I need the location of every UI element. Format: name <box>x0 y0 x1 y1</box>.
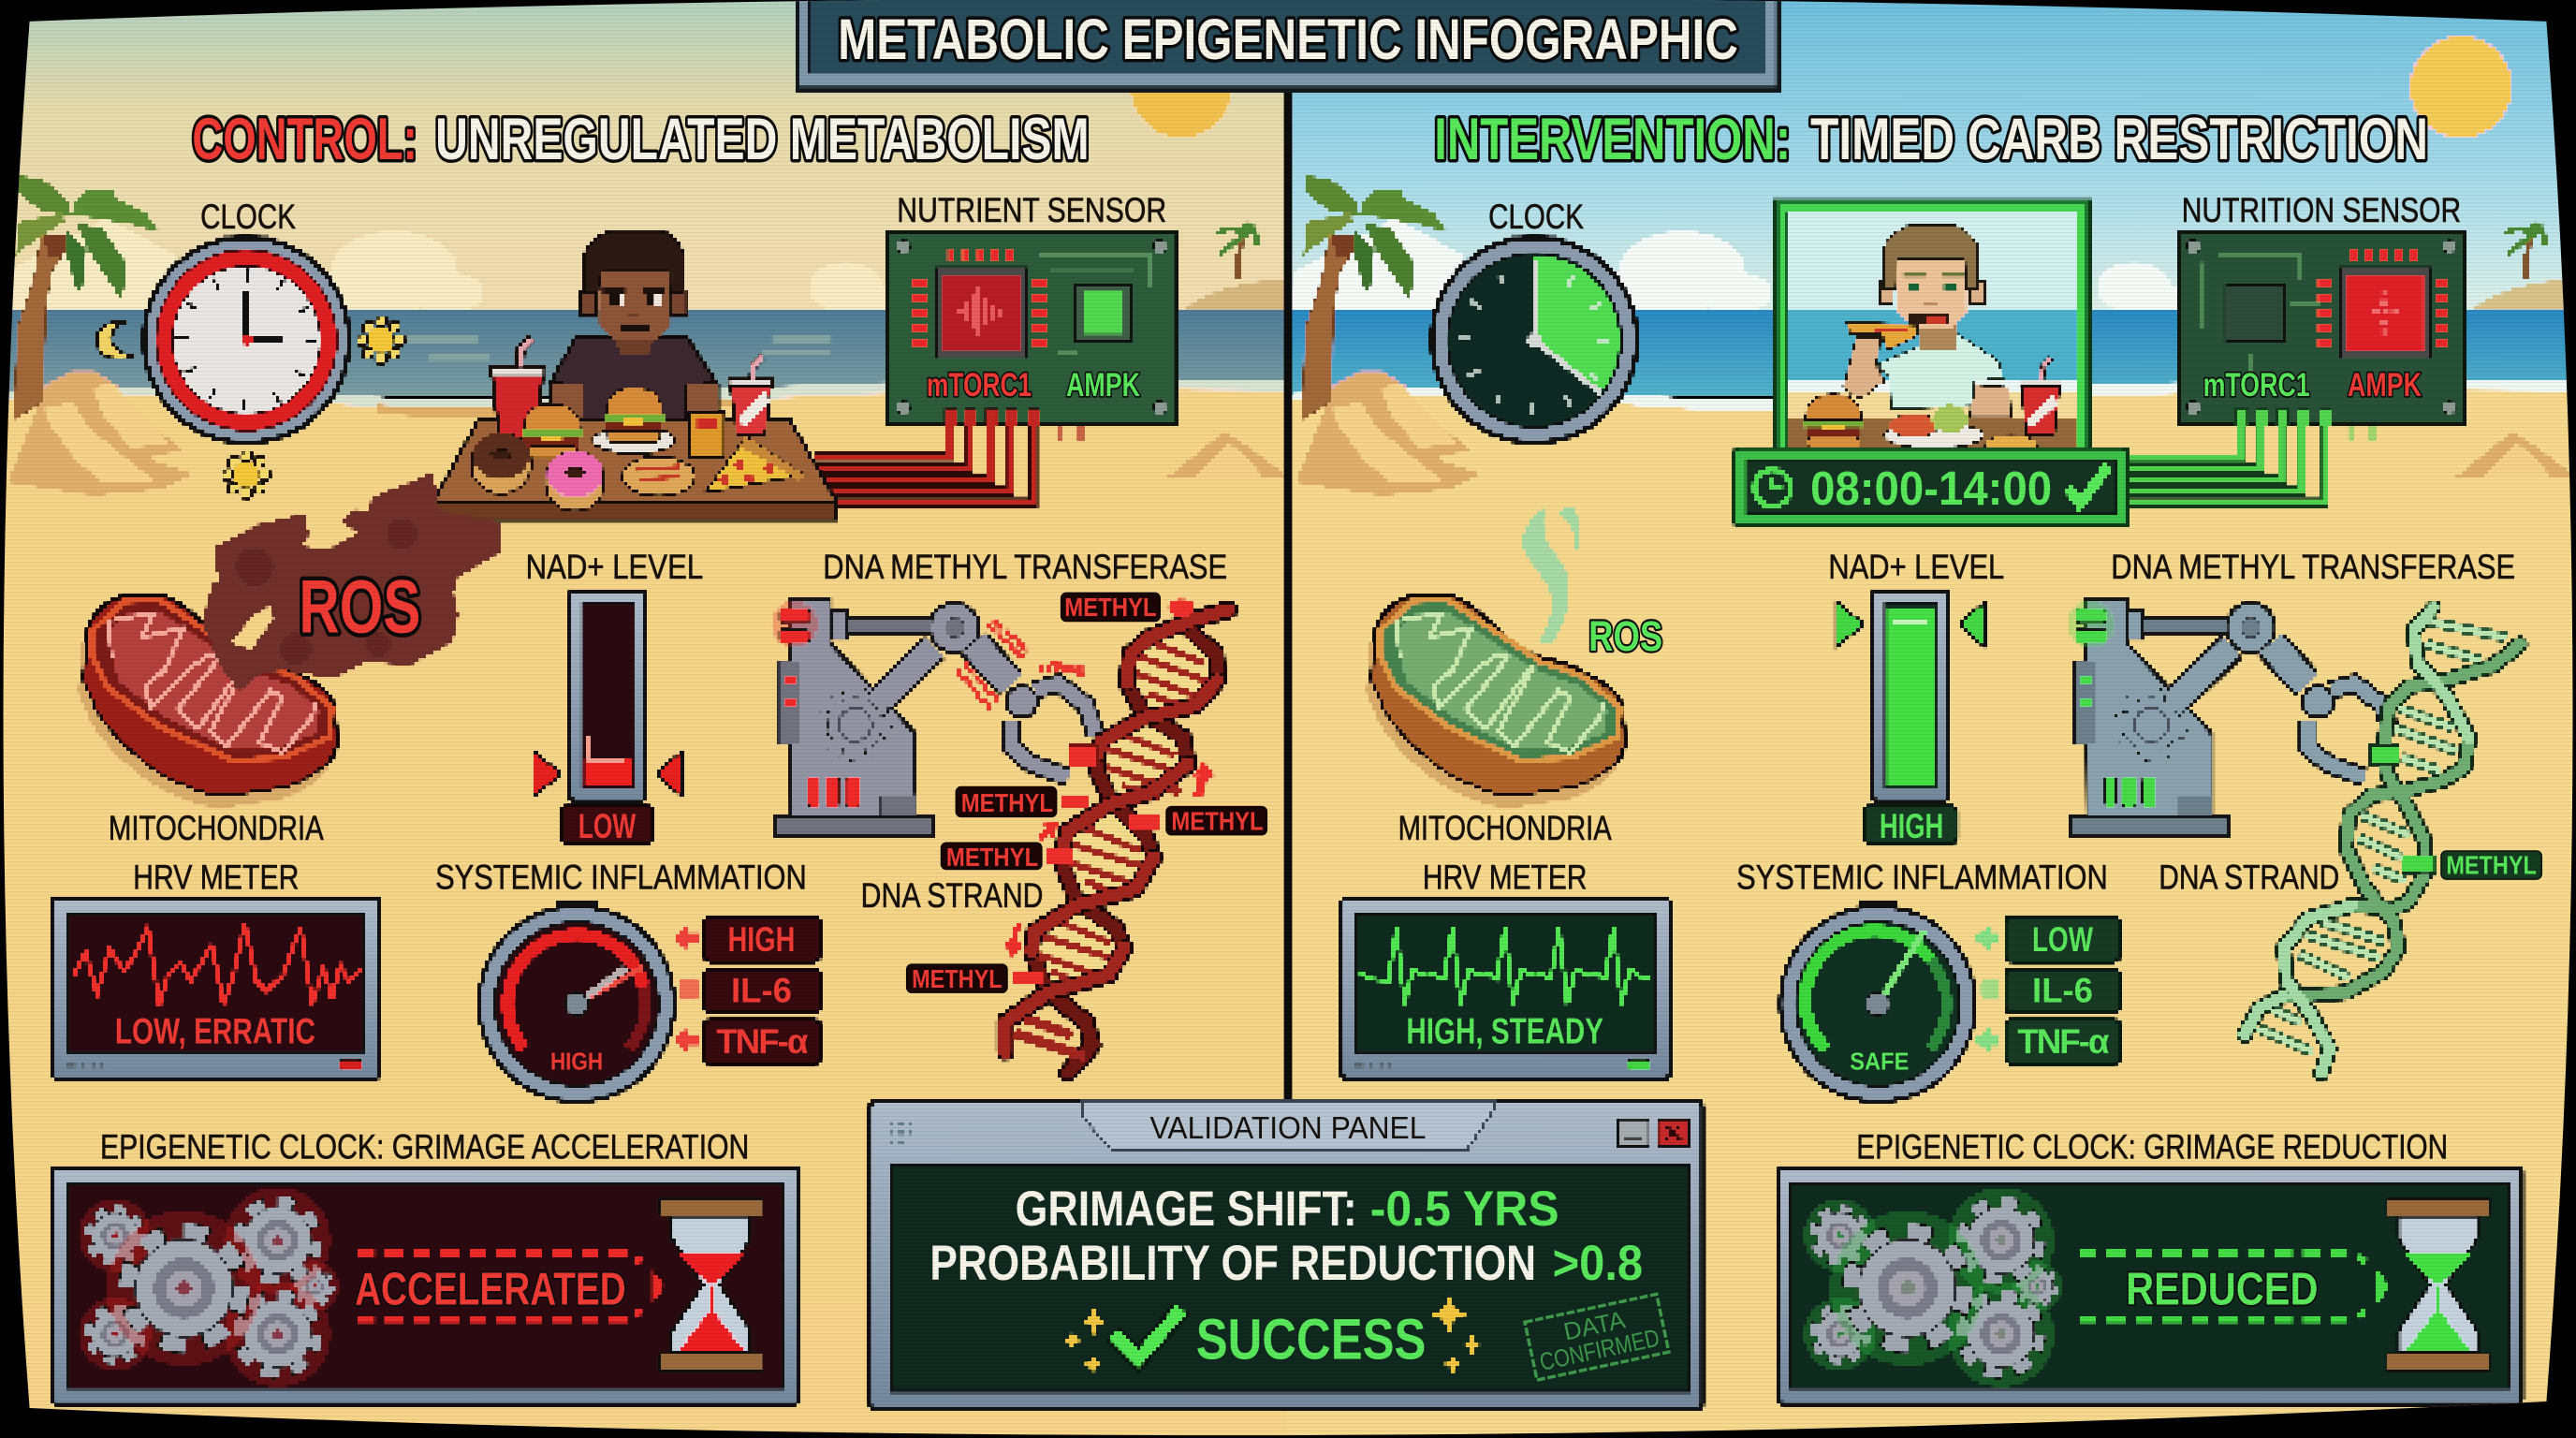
eating window badge: 08:00-14:00 <box>1810 462 2052 515</box>
table and food <box>433 339 836 520</box>
eating window badge <box>1734 448 2128 526</box>
hrv meter control <box>52 858 379 1078</box>
nad+ meter: NAD+ LEVEL <box>526 548 703 586</box>
inflammation gauge control <box>435 858 820 1101</box>
backdrop: control beach <box>0 0 1288 1438</box>
clock <box>144 198 348 442</box>
heading: control <box>191 114 1090 163</box>
nutrient sensor <box>889 191 1175 426</box>
data confirmed stamp: CONFIRMED <box>1537 1324 1661 1376</box>
epigenetic clock: acceleration: EPIGENETIC CLOCK: GRIMAGE ACCELERATION <box>100 1127 749 1166</box>
inflammation gauge control: HIGH <box>728 920 795 959</box>
hrv meter intervention: HIGH, STEADY <box>1406 1011 1603 1051</box>
heading: control: UNREGULATED METABOLISM <box>435 107 1090 172</box>
title banner <box>798 0 1778 89</box>
nad+ meter <box>526 548 703 845</box>
nad+ meter high: HIGH <box>1880 807 1943 845</box>
mitochondria healthy <box>1367 594 1625 847</box>
validation panel: VALIDATION PANEL <box>1150 1111 1426 1146</box>
validation panel <box>871 1103 1702 1408</box>
sensor wires <box>816 419 1081 503</box>
mitochondria healthy: MITOCHONDRIA <box>1398 809 1612 847</box>
methyl tags control: METHYL <box>946 843 1038 872</box>
data confirmed stamp <box>1525 1294 1669 1380</box>
inflammation gauge intervention: LOW <box>2032 920 2093 959</box>
man <box>552 231 718 420</box>
dna strand intervention <box>2159 608 2520 1073</box>
hrv meter intervention: HRV METER <box>1423 858 1587 896</box>
methyl tags control: METHYL <box>1064 593 1157 622</box>
inflammation gauge intervention: IL-6 <box>2032 972 2093 1010</box>
methyl tags control: METHYL <box>961 788 1053 817</box>
success row <box>1064 1297 1479 1373</box>
methyl tags control <box>907 593 1266 993</box>
dna methyl transferase robot: DNA METHYL TRANSFERASE <box>823 548 1227 586</box>
inflammation gauge control: HIGH <box>550 1048 603 1076</box>
dna methyl transferase robot calm <box>2069 548 2515 835</box>
character: overeating man at table <box>433 231 836 520</box>
panel: intervention <box>1342 107 2541 1403</box>
clock: eating window <box>1432 198 1636 442</box>
heading: control: CONTROL: <box>192 107 417 172</box>
inflammation gauge intervention: SYSTEMIC INFLAMMATION <box>1736 858 2108 896</box>
data confirmed stamp: DATA <box>1561 1305 1628 1346</box>
methyl tag intervention: METHYL <box>2446 851 2537 880</box>
epigenetic clock: reduction: REDUCED <box>2126 1264 2318 1314</box>
inflammation gauge control: SYSTEMIC INFLAMMATION <box>435 858 807 896</box>
inflammation gauge control: IL-6 <box>731 972 792 1010</box>
ros wisp: ROS <box>1588 612 1662 660</box>
heading: intervention <box>1434 107 2428 172</box>
methyl tags control: METHYL <box>1171 806 1264 835</box>
nutrition sensor: AMPK <box>2348 367 2422 404</box>
methyl tags control: METHYL <box>912 964 1003 993</box>
nad+ meter: LOW <box>578 807 636 845</box>
inflammation gauge intervention: SAFE <box>1850 1048 1909 1076</box>
icon: sun right <box>359 317 404 363</box>
panel: control <box>52 107 1266 1403</box>
epigenetic clock: reduction: EPIGENETIC CLOCK: GRIMAGE REDUCTION <box>1856 1127 2448 1166</box>
nad+ meter high <box>1828 548 2004 845</box>
inflammation gauge intervention: TNF-α <box>2017 1022 2110 1061</box>
epigenetic clock: reduction <box>1779 1127 2522 1403</box>
inflammation gauge intervention <box>1736 858 2119 1101</box>
grimage shift result: -0.5 YRS <box>1370 1181 1559 1237</box>
probability result: >0.8 <box>1553 1236 1643 1291</box>
centre divider <box>1284 82 1292 1117</box>
nutrition sensor <box>2178 191 2465 426</box>
epigenetic clock: acceleration <box>52 1127 798 1403</box>
hrv meter control: LOW, ERRATIC <box>115 1011 315 1051</box>
inflammation gauge control: TNF-α <box>716 1022 809 1061</box>
heading: intervention: TIMED CARB RESTRICTION <box>1810 107 2428 172</box>
dna strand control: DNA STRAND <box>861 876 1043 915</box>
clock: CLOCK <box>200 198 296 236</box>
portrait: man eating in window <box>1776 200 2089 457</box>
hrv meter intervention <box>1342 858 1669 1078</box>
hrv meter control: HRV METER <box>133 858 299 896</box>
grimage shift result: GRIMAGE SHIFT: <box>1016 1181 1357 1237</box>
backdrop: intervention beach <box>1288 0 2576 1438</box>
dna strand intervention: DNA STRAND <box>2159 858 2339 896</box>
clock: eating window: CLOCK <box>1488 198 1584 236</box>
nutrition sensor: mTORC1 <box>2203 367 2310 404</box>
mitochondria <box>79 594 337 847</box>
icon: moon <box>97 320 133 358</box>
ros smoke cloud: ROS <box>299 565 420 650</box>
nutrient sensor: mTORC1 <box>927 367 1032 404</box>
epigenetic clock: acceleration: ACCELERATED <box>355 1264 626 1314</box>
ros wisp <box>1521 506 1662 660</box>
sensor wires <box>2130 419 2372 503</box>
probability result: PROBABILITY OF REDUCTION <box>929 1236 1536 1291</box>
mitochondria: MITOCHONDRIA <box>109 809 324 847</box>
dna strand control <box>861 600 1229 1073</box>
nutrient sensor: NUTRIENT SENSOR <box>897 191 1166 229</box>
ros smoke cloud <box>205 477 500 687</box>
dna methyl transferase robot <box>772 548 1227 835</box>
icon: sun bottom <box>224 452 270 498</box>
nad+ meter high: NAD+ LEVEL <box>1828 548 2004 586</box>
nutrition sensor: NUTRITION SENSOR <box>2182 191 2461 229</box>
title banner: METABOLIC EPIGENETIC INFOGRAPHIC <box>838 7 1738 72</box>
heading: intervention: INTERVENTION: <box>1434 107 1791 172</box>
success row: SUCCESS <box>1196 1307 1426 1372</box>
nutrient sensor: AMPK <box>1066 367 1141 404</box>
